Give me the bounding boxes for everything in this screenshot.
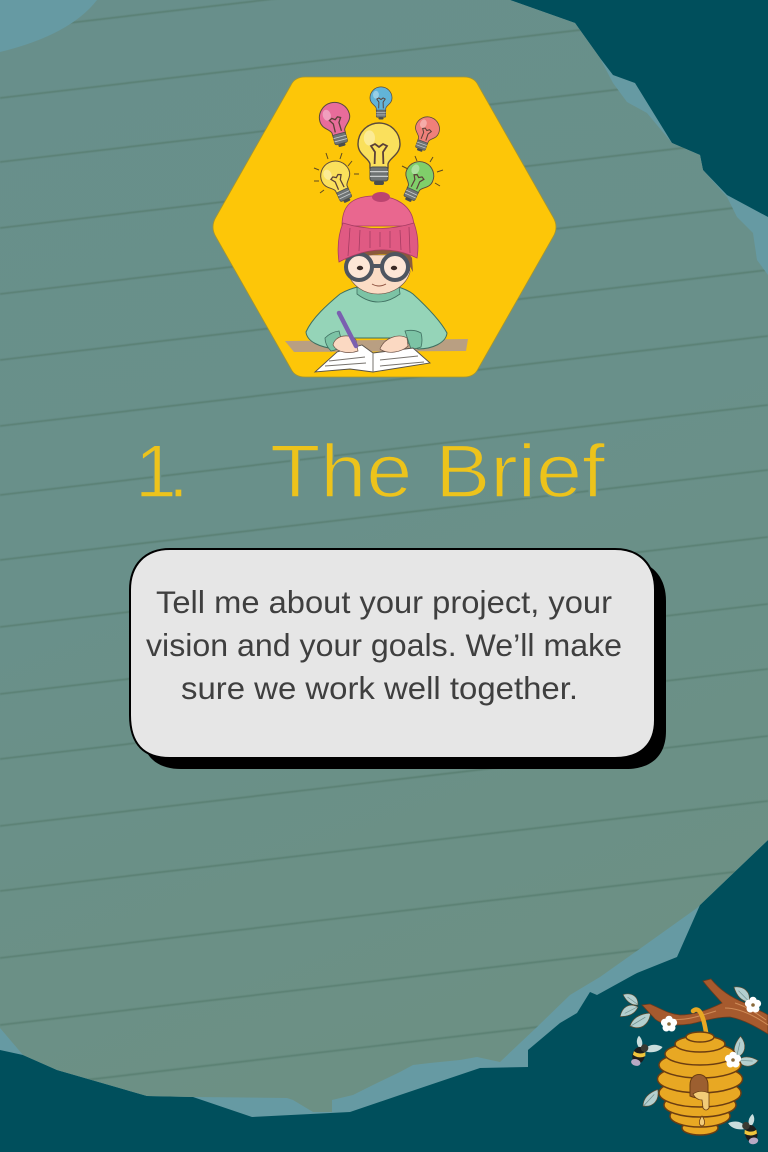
boy figure (306, 192, 447, 372)
torn light corner (0, 0, 97, 52)
icon: light bulbs (314, 87, 443, 208)
hair (345, 248, 413, 272)
hexagon illustration (213, 77, 556, 377)
body text: sure we work well together. (181, 670, 578, 706)
text card (130, 549, 666, 769)
card body (130, 549, 655, 758)
flowers (661, 997, 761, 1068)
hive hanger (693, 1010, 706, 1032)
branch (642, 979, 768, 1034)
branch grain (670, 1003, 768, 1025)
collar (357, 286, 400, 302)
title: . (168, 429, 189, 513)
hive entrance (690, 1074, 708, 1098)
honey drip (693, 1091, 709, 1110)
title: The Brief (270, 429, 605, 513)
pink hat (338, 192, 418, 262)
sweater (306, 286, 447, 349)
yellow hexagon (213, 77, 556, 377)
card shadow (141, 560, 666, 769)
hands (333, 336, 408, 353)
table (285, 339, 468, 352)
icon: beehive on branch (619, 979, 768, 1148)
bees (630, 1035, 759, 1148)
body text: Tell me about your project, your (156, 584, 612, 620)
body text: vision and your goals. We’ll make (146, 627, 622, 663)
leaves (619, 983, 758, 1109)
face (347, 255, 410, 294)
title: 1 (135, 429, 177, 513)
pencil (339, 313, 356, 346)
glasses (346, 254, 408, 280)
hive bands (658, 1032, 742, 1135)
honey drop (699, 1116, 705, 1126)
sleeve cuffs (325, 330, 422, 351)
body text (146, 584, 622, 706)
notebook (315, 345, 430, 372)
eyes and mouth (357, 266, 363, 270)
